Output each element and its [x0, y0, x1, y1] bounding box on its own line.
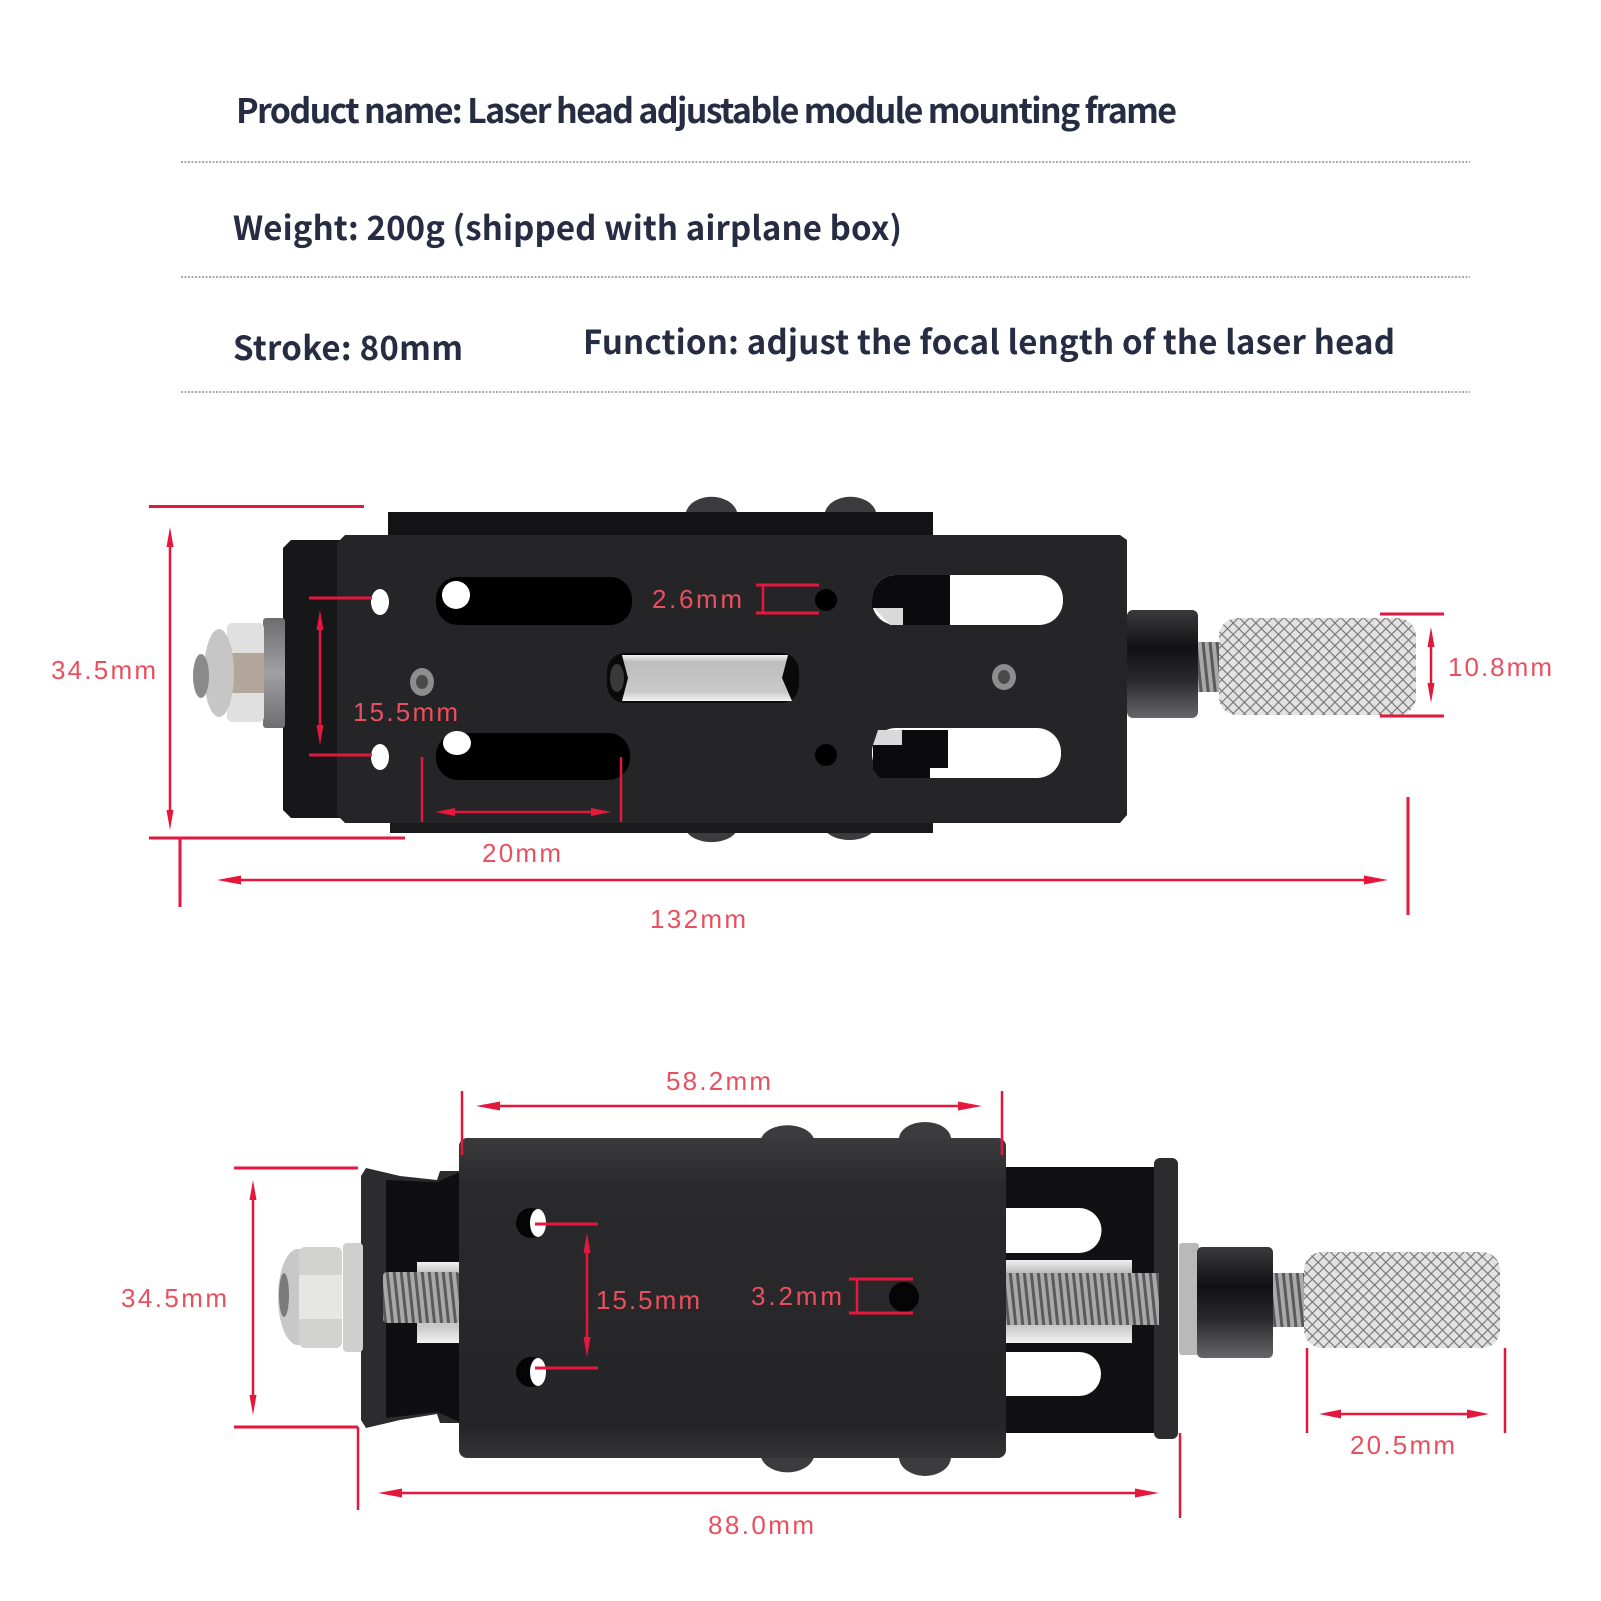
right threaded rod — [1006, 1273, 1159, 1325]
small cap screws — [410, 664, 1016, 696]
adjustment hole — [889, 1282, 919, 1312]
dark cylinder nut — [1127, 610, 1198, 718]
dimension: closed view hole spacing 15.5mm: 15.5mm — [596, 1285, 700, 1315]
dimension: knob length 20.5mm — [1307, 1348, 1505, 1460]
dimension: overall length 132mm: 132mm — [650, 904, 746, 934]
knurled thumb knob — [1219, 618, 1416, 715]
product photo: closed view with threaded rod — [278, 1122, 1500, 1476]
left threaded rod — [383, 1272, 460, 1323]
icon: top screw heads — [686, 497, 876, 512]
center slot with silver bar — [607, 653, 799, 703]
dimension: cover width 58.2mm — [462, 1066, 1002, 1155]
washer — [263, 618, 285, 728]
lower left slot — [436, 733, 630, 780]
knurled thumb knob — [1304, 1252, 1500, 1348]
washer — [343, 1243, 363, 1352]
bottom rail — [390, 815, 933, 833]
dimension: hole 2.6mm: 2.6mm — [652, 584, 742, 614]
top rail — [388, 512, 933, 536]
panel: specifications — [181, 84, 1470, 392]
icon: bottom screw heads — [761, 1457, 951, 1476]
dimension: closed view hole spacing 15.5mm — [535, 1224, 700, 1368]
dimension: cover width 58.2mm: 58.2mm — [666, 1066, 771, 1096]
dimension: closed view height 34.5mm: 34.5mm — [121, 1283, 227, 1313]
main cover plate — [459, 1138, 1006, 1458]
end flange — [1154, 1158, 1178, 1439]
dimension: overall length 132mm — [180, 797, 1408, 934]
dimension: slot length 20mm — [422, 757, 621, 868]
upper left slot — [436, 577, 632, 625]
left end bracket — [361, 1168, 462, 1428]
lower right slot — [872, 728, 1061, 778]
lower left slot highlight — [443, 731, 471, 755]
main plate — [337, 535, 1127, 823]
product photo: side view with open slots — [193, 497, 1416, 842]
upper right slot — [872, 575, 1063, 625]
right frame — [1000, 1167, 1160, 1433]
dimension: top view hole spacing 15.5mm: 15.5mm — [353, 697, 458, 727]
screw thread — [1198, 642, 1225, 692]
icon: top screw heads — [761, 1122, 951, 1139]
right slots — [1006, 1208, 1102, 1396]
dimension: top view height 34.5mm: 34.5mm — [51, 655, 156, 685]
bolt end — [193, 629, 234, 717]
dark cylinder nut — [1197, 1247, 1273, 1358]
small black holes — [815, 589, 837, 766]
right silver plate — [1006, 1260, 1132, 1343]
text: function: Function: adjust the focal length of the laser head — [583, 316, 1395, 364]
mounting holes left — [371, 589, 389, 770]
heading: product name: Product name: Laser head adjustable module mounting frame — [236, 84, 1177, 133]
dimension: closed view height 34.5mm — [121, 1168, 358, 1427]
dimension: slot length 20mm: 20mm — [482, 838, 561, 868]
icon: bottom screw heads — [686, 830, 874, 842]
screw thread — [1273, 1273, 1307, 1327]
text: stroke: Stroke: 80mm — [233, 322, 463, 370]
left silver plate — [417, 1262, 461, 1343]
dimension: top view hole spacing 15.5mm — [309, 598, 458, 755]
dimension: knob length 20.5mm: 20.5mm — [1350, 1430, 1455, 1460]
hex nut — [278, 1247, 342, 1348]
dimension: knob diameter 10.8mm: 10.8mm — [1448, 652, 1552, 682]
left bracket — [283, 540, 353, 818]
text: weight: Weight: 200g (shipped with airplane box) — [233, 202, 902, 250]
hex nut — [227, 623, 264, 722]
mounting holes — [516, 1208, 546, 1387]
dimension: closed length 88.0mm: 88.0mm — [708, 1510, 814, 1540]
washer — [1179, 1243, 1199, 1355]
dimension: hole 3.2mm: 3.2mm — [751, 1281, 842, 1311]
dimension: knob diameter 10.8mm — [1380, 614, 1552, 716]
dimension: top view height 34.5mm — [51, 506, 405, 838]
upper left slot highlight — [442, 581, 470, 609]
dimension: closed length 88.0mm — [358, 1427, 1180, 1540]
